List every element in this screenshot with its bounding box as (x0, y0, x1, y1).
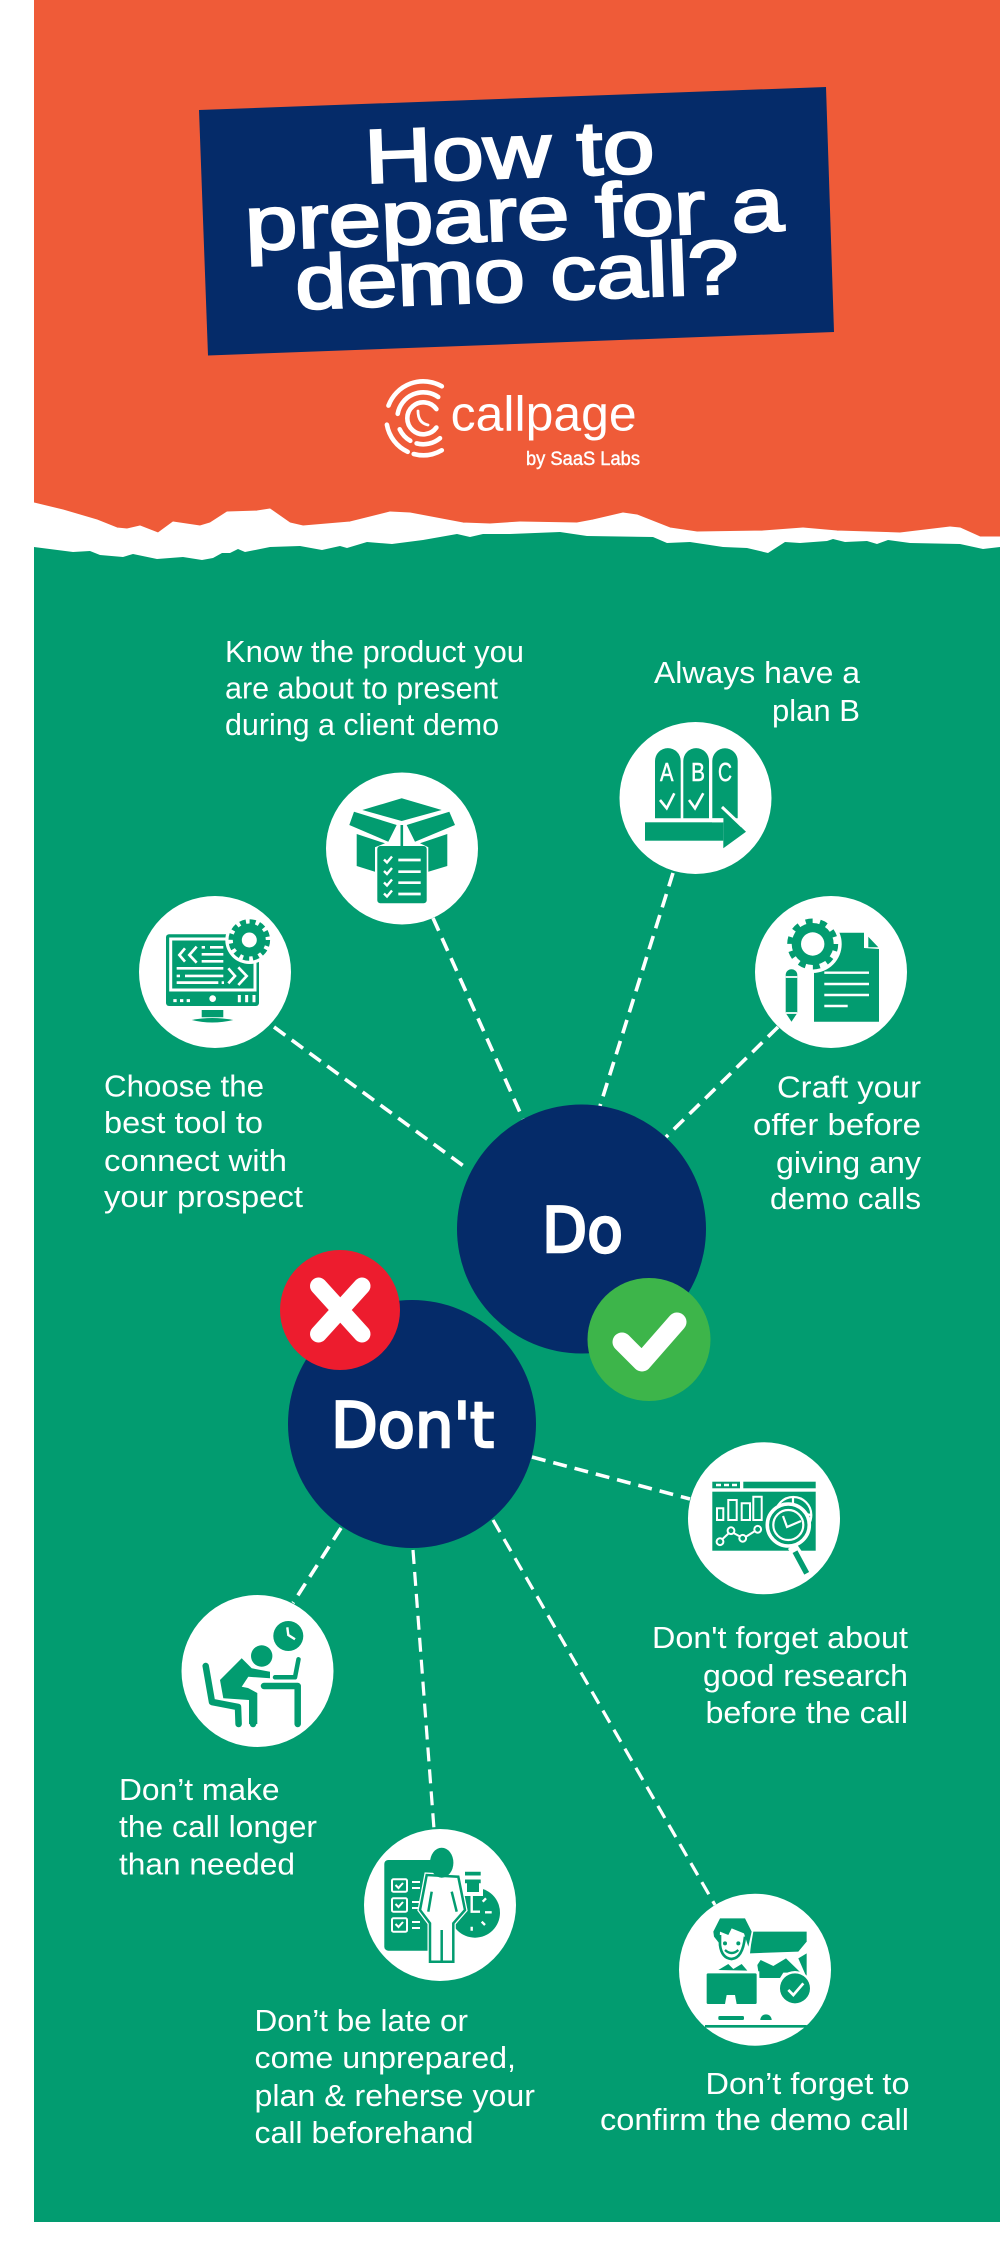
text: Don’t be late or (254, 2004, 468, 2038)
connector: Do to know the product (433, 918, 523, 1119)
text: giving any (776, 1146, 922, 1180)
icon: analytics window with magnifier (688, 1442, 840, 1594)
icon: person with monitor and speech bubble (679, 1894, 831, 2046)
title text: How to (363, 104, 656, 200)
item: know the product (225, 635, 524, 924)
text (600, 2067, 910, 2137)
title text: prepare for a (243, 162, 786, 267)
text: best tool to (104, 1106, 263, 1140)
icon: ABC arrow: A (660, 757, 674, 787)
item: being late (254, 1829, 535, 2150)
text (119, 1773, 317, 1882)
text: connect with (104, 1144, 287, 1178)
text (254, 2004, 535, 2150)
text: Craft your (777, 1070, 921, 1104)
text: are about to present (225, 672, 499, 706)
orange header background (34, 0, 1000, 560)
text (654, 656, 860, 728)
text: during a client demo (225, 708, 499, 742)
connector: Do to craft offer (666, 1027, 778, 1137)
text: demo calls (770, 1182, 921, 1216)
title banner (199, 87, 834, 356)
text: plan & reherse your (254, 2079, 535, 2113)
icon: document with gear and pencil (755, 896, 907, 1048)
text (652, 1621, 909, 1730)
text: Don’t forget to (706, 2067, 910, 2101)
title text (241, 100, 788, 328)
text: your prospect (104, 1180, 304, 1214)
item: confirm the demo (600, 1894, 910, 2137)
item: plan B (620, 656, 860, 874)
text: come unprepared, (254, 2041, 516, 2075)
text: Choose the (104, 1070, 264, 1104)
Do hub (457, 1104, 706, 1354)
text (753, 1070, 922, 1216)
icon: person with checklist and stopwatch (364, 1829, 516, 1981)
green body background (34, 532, 1000, 2222)
text (225, 635, 524, 742)
icon: person at desk with clock (182, 1595, 334, 1747)
logo wordmark: callpage (451, 388, 637, 442)
icon: monitor with gear (139, 896, 291, 1048)
connector: Do to plan B (600, 873, 673, 1106)
icon: green check badge (588, 1278, 710, 1401)
item: good research (652, 1442, 909, 1730)
Do hub: Do (542, 1194, 623, 1267)
text: before the call (706, 1696, 908, 1730)
text: confirm the demo call (600, 2103, 909, 2137)
connector: Do to choose tool (274, 1027, 469, 1170)
item: craft your offer (753, 896, 922, 1216)
text: plan B (772, 694, 860, 728)
connector: Don't to late (413, 1550, 434, 1829)
Don't hub: Don't (331, 1389, 494, 1462)
icon: ABC arrow (620, 722, 772, 874)
connector: Don't to confirm (493, 1520, 715, 1905)
text: Don't forget about (652, 1621, 909, 1655)
icon: box with checklist (326, 772, 478, 924)
text: the call longer (119, 1810, 317, 1844)
text (104, 1070, 304, 1214)
text: Don’t make (119, 1773, 280, 1807)
text: Always have a (654, 656, 860, 690)
title text: demo call? (294, 225, 740, 326)
callpage logo (387, 381, 640, 470)
icon: ABC arrow: B (691, 757, 705, 787)
icon: ABC arrow: C (718, 757, 732, 787)
text: than needed (119, 1848, 295, 1882)
logo byline: by SaaS Labs (526, 449, 640, 470)
text: good research (703, 1659, 908, 1693)
text: call beforehand (254, 2116, 474, 2150)
text: Know the product you (225, 635, 524, 669)
torn paper white strip (34, 503, 1000, 570)
text: offer before (753, 1108, 921, 1142)
item: call length (119, 1595, 334, 1882)
logo mark (387, 381, 442, 455)
icon: red cross badge (280, 1250, 400, 1370)
connector: Don't to research (532, 1457, 690, 1499)
Don't hub (288, 1300, 536, 1548)
connector: Don't to call length (293, 1528, 341, 1603)
item: choose the tool (104, 896, 304, 1214)
